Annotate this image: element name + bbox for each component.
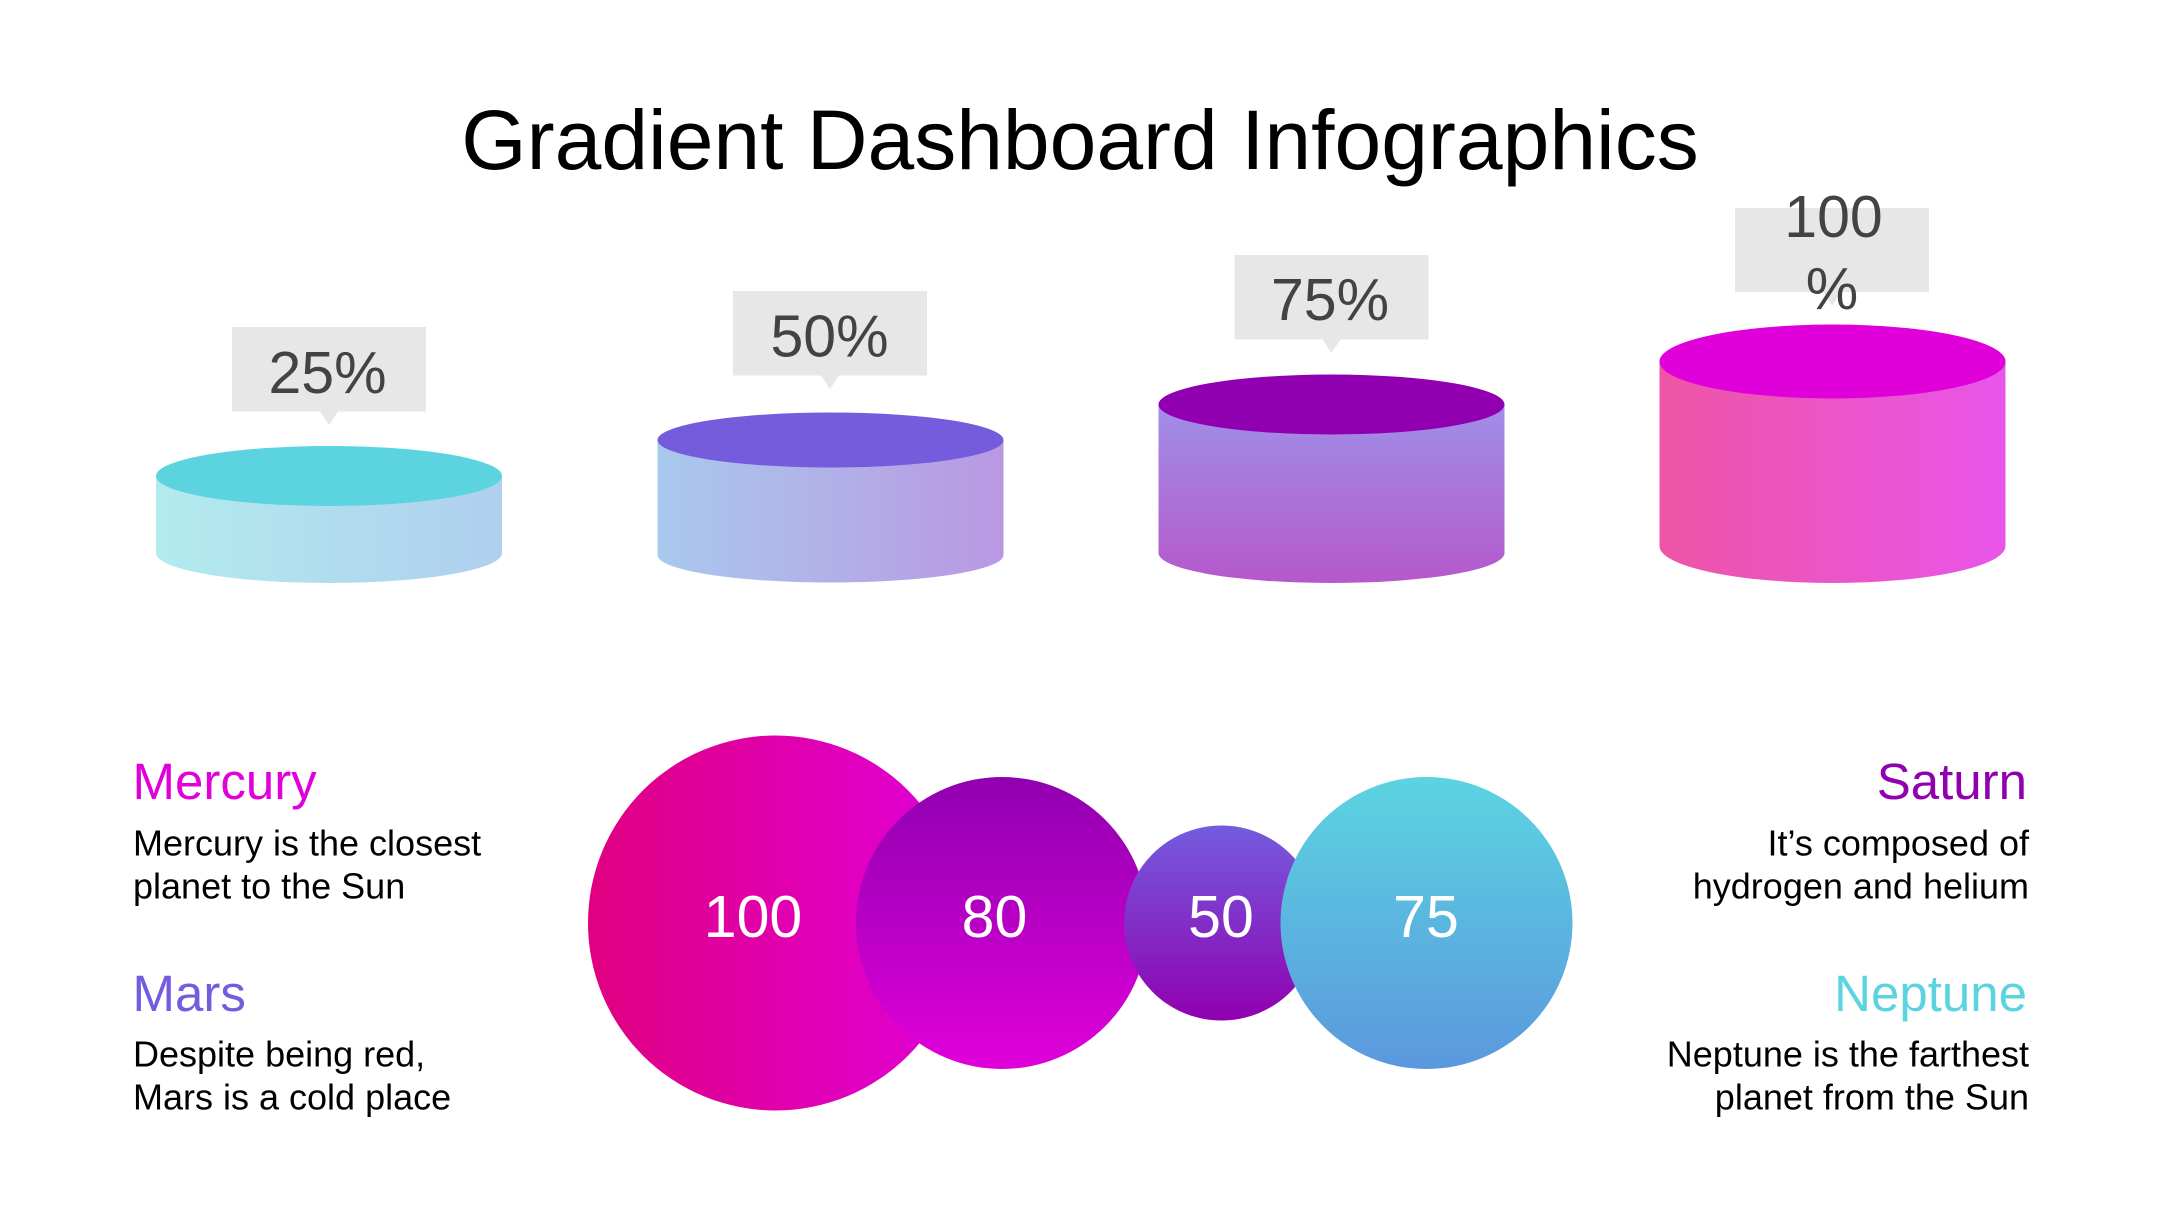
text block: Saturn: Saturn	[1877, 753, 2027, 810]
callout: 50%: 50%	[770, 304, 889, 370]
callout: 100%: %	[1806, 256, 1858, 322]
text block: Mercury: planet to the Sun	[133, 866, 405, 906]
text block: Saturn: hydrogen and helium	[1693, 866, 2029, 906]
callout: 100%: 100	[1784, 184, 1883, 250]
cylinder: 75%	[1158, 374, 1504, 583]
bubble: 75: 75	[1393, 884, 1459, 950]
text block: Mercury	[132, 753, 481, 906]
cylinder: 100%	[1660, 324, 2006, 583]
text block: Mercury: Mercury is the closest	[133, 822, 481, 864]
cylinder: 25%	[156, 446, 502, 583]
text block: Neptune: planet from the Sun	[1715, 1076, 2029, 1118]
text block: Mars: Mars	[132, 965, 246, 1022]
bubble: 80	[856, 777, 1148, 1069]
callout: 25%: 25%	[268, 340, 387, 406]
text block: Saturn: It’s composed of	[1768, 822, 2030, 864]
text block: Mars: Mars is a cold place	[133, 1076, 451, 1118]
text block: Saturn	[1693, 753, 2030, 906]
callout: 75%	[1234, 255, 1428, 353]
text block: Mercury: Mercury	[132, 753, 317, 810]
callout: 100%	[1735, 184, 1929, 322]
text block: Neptune: Neptune is the farthest	[1667, 1034, 2029, 1074]
callout: 50%	[733, 291, 927, 389]
text block: Mars: Despite being red,	[133, 1034, 425, 1074]
text block: Neptune: Neptune	[1834, 965, 2027, 1022]
title: Gradient Dashboard Infographics	[461, 93, 1699, 187]
bubble: 100: 100	[704, 884, 802, 950]
bubble: 80: 80	[962, 884, 1027, 950]
bubble: 50: 50	[1188, 884, 1254, 950]
callout: 75%: 75%	[1271, 267, 1389, 333]
text block: Mars	[132, 965, 451, 1118]
text block: Neptune	[1667, 965, 2029, 1118]
bubble: 75	[1280, 777, 1572, 1069]
bubble: 50	[1124, 826, 1319, 1020]
bubble: 100	[588, 736, 963, 1110]
cylinder: 50%	[658, 412, 1004, 582]
callout: 25%	[232, 327, 426, 425]
